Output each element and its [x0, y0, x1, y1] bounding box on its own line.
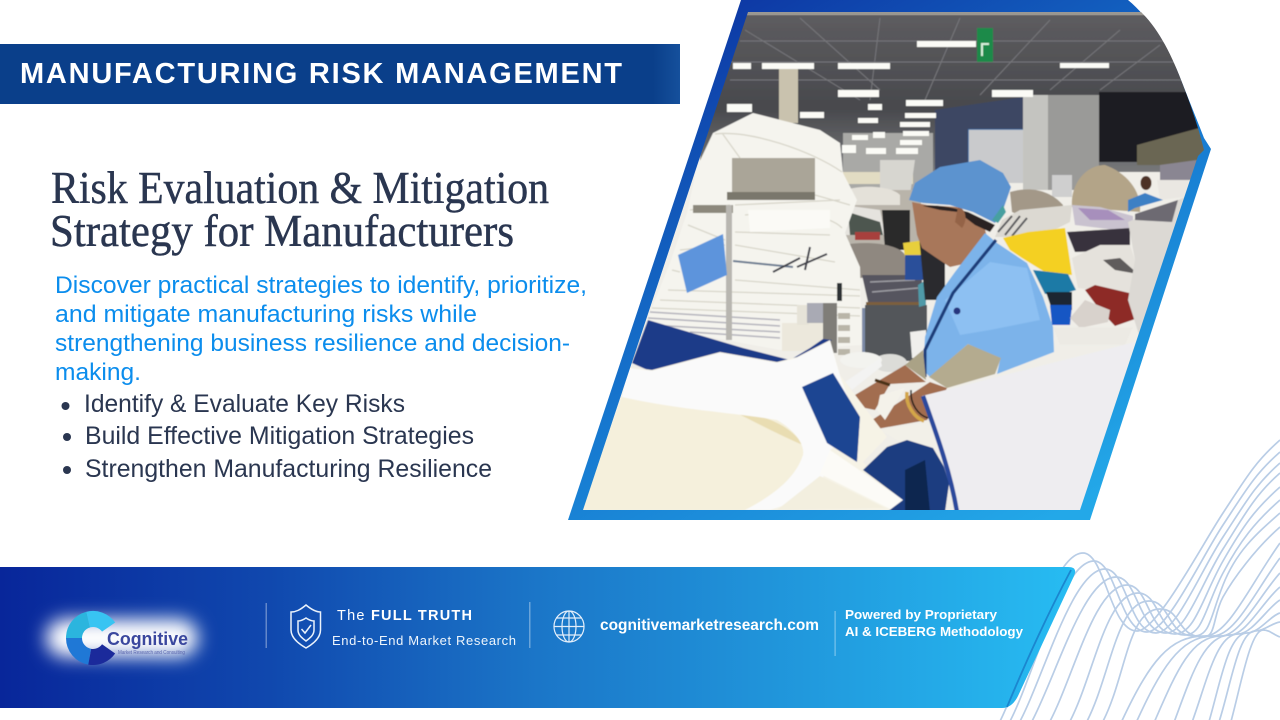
- woman: sleeves: [929, 344, 1001, 388]
- deep background: [843, 133, 933, 193]
- woman: forearms: [855, 365, 947, 429]
- bullet list: Strengthen Manufacturing Resilience: [85, 455, 492, 483]
- heading: Risk Evaluation & Mitigation: [51, 163, 549, 213]
- intro paragraph: and mitigate manufacturing risks while: [55, 301, 477, 328]
- logo: Cognitive: [107, 629, 188, 649]
- table fabric between hands: [877, 393, 894, 420]
- footer bar: [0, 567, 1075, 708]
- title banner: [0, 44, 680, 104]
- ceiling: [700, 12, 1210, 172]
- website url: cognitivemarketresearch.com: [600, 617, 819, 634]
- woman: shirt: [923, 233, 1054, 377]
- logo: Market Research and Consulting: [118, 650, 185, 656]
- intro paragraph: [55, 272, 587, 386]
- wave overlay on footer edge: [1007, 570, 1071, 707]
- bullet list: Identify & Evaluate Key Risks: [84, 390, 405, 418]
- logo: [46, 619, 198, 657]
- back wall: [1099, 92, 1209, 162]
- heading: [50, 163, 549, 256]
- intro paragraph: Discover practical strategies to identify, prioritize,: [55, 272, 587, 299]
- exit sign: [977, 28, 993, 62]
- photo: factory worker sewing: [570, 10, 1220, 520]
- bangles: [875, 380, 928, 421]
- intro paragraph: strengthening business resilience and decision-: [55, 330, 570, 357]
- title banner: MANUFACTURING RISK MANAGEMENT: [20, 58, 622, 90]
- woman: neck and face: [912, 202, 987, 267]
- foreground navy fabric: [632, 320, 832, 372]
- woman: hairnet: [909, 160, 1011, 223]
- foreground cream fabric: [645, 340, 881, 430]
- divider: [529, 602, 530, 648]
- icon: globe: [554, 611, 584, 642]
- sewing machine: [782, 283, 907, 390]
- white fabric stack: [645, 113, 862, 350]
- tagline: the full truth: End-to-End Market Research: [332, 633, 516, 648]
- icon: shield: [291, 605, 320, 648]
- ceiling lights: [727, 41, 1109, 154]
- powered by text: [845, 608, 1023, 639]
- white fabric right: [922, 389, 947, 476]
- intro paragraph: making.: [55, 359, 141, 386]
- divider: [266, 603, 267, 648]
- photo frame: [568, 0, 1211, 520]
- tagline: the full truth: The FULL TRUTH: [337, 608, 472, 624]
- decorative wave lines: [998, 440, 1280, 720]
- middle background piles: [843, 187, 945, 361]
- powered by text: Powered by Proprietary: [845, 608, 997, 622]
- woman: lanyard: [925, 240, 996, 377]
- bullet list: Build Effective Mitigation Strategies: [85, 422, 474, 450]
- bullet list: [62, 390, 492, 483]
- divider: [834, 611, 836, 656]
- machine plate and pole: [693, 158, 827, 340]
- blue paper: [678, 234, 727, 293]
- right piles of cloth: [995, 160, 1197, 345]
- tagline: the full truth: [332, 608, 516, 648]
- heading: Strategy for Manufacturers: [50, 206, 514, 256]
- navy patches: [802, 373, 860, 462]
- powered by text: AI & ICEBERG Methodology: [845, 625, 1023, 639]
